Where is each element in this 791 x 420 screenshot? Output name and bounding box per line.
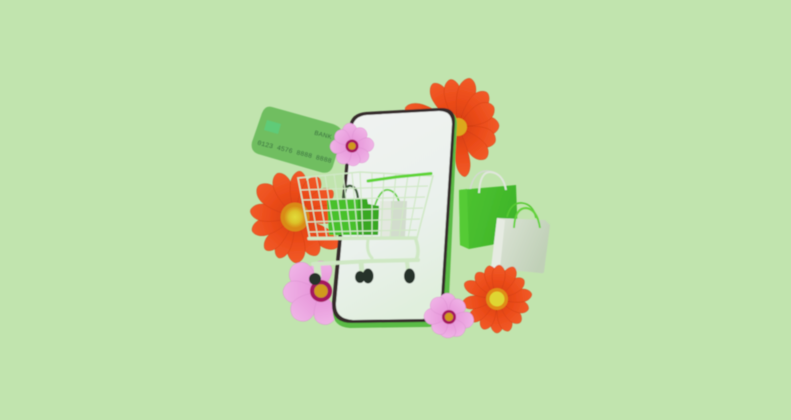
- flower: pink on card: [330, 122, 375, 167]
- green bag left fold: [459, 189, 469, 249]
- card chip: [264, 120, 281, 134]
- cart wheels: [309, 268, 415, 285]
- flower: orange left: [249, 170, 343, 263]
- green bag front: [459, 185, 518, 249]
- phone green casing: [333, 110, 457, 328]
- card number: 0123 4576 8888 8888: [256, 140, 332, 166]
- cart top handle: [368, 174, 431, 181]
- credit card: [252, 107, 342, 173]
- cart white bag shade: [380, 201, 391, 237]
- cart green bag handles: [344, 186, 358, 199]
- cart wire basket: [298, 172, 433, 239]
- card body: [252, 107, 342, 173]
- flower: orange bottom right: [461, 264, 533, 333]
- cart base frame: [309, 238, 418, 276]
- white bag front handle: [514, 208, 540, 228]
- flower: orange behind phone top right: [402, 76, 499, 177]
- cart: bags inside: [327, 186, 407, 237]
- white bag back handle: [507, 203, 536, 218]
- smartphone: [332, 108, 457, 328]
- green bag back handle: [470, 171, 505, 190]
- white bag body: [491, 218, 550, 273]
- cart green bag: [327, 199, 379, 235]
- cart green bag shade: [358, 199, 379, 235]
- shopping bag: green: [459, 171, 518, 249]
- cart white bag handles: [375, 190, 400, 205]
- shopping cart: [298, 172, 433, 285]
- cart white bag: [380, 201, 407, 237]
- flower: pink bottom: [424, 292, 475, 340]
- white bag left side: [491, 218, 505, 269]
- phone screen: [336, 111, 452, 320]
- shopping bag: white: [491, 203, 550, 273]
- illustration: online shopping: [249, 76, 550, 340]
- card bank name: BANK: [313, 130, 333, 141]
- green bag front handle: [479, 172, 506, 193]
- phone dark frame: [332, 108, 455, 323]
- flower: pink lower left: [283, 257, 338, 326]
